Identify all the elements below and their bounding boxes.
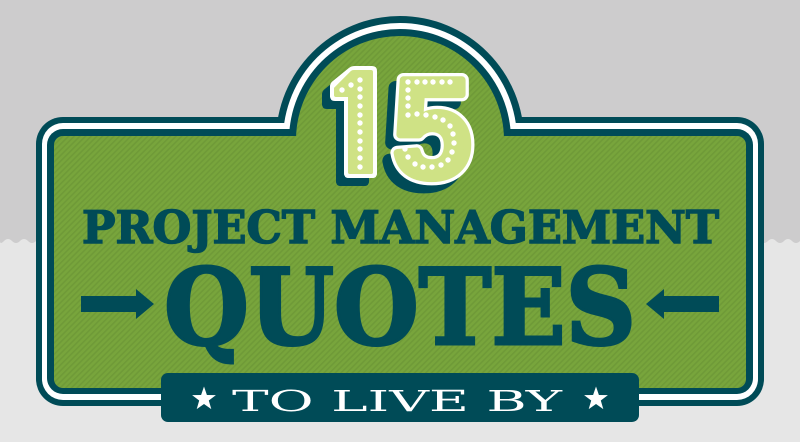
green panel [54,36,746,388]
number shadow: 5 [385,57,463,215]
banner text: TO LIVE BY [232,384,564,418]
number 15 [322,66,474,194]
heading: project management: PROJECT MANAGEMENT [82,201,720,254]
banner [161,373,639,422]
number one [330,66,377,178]
number dots [339,77,457,170]
white band [42,23,758,400]
star: right [584,386,608,409]
arrow: left [81,289,154,319]
arrow: right [646,289,719,319]
number five: 5 [393,49,471,207]
heading: quotes: QUOTES [164,245,636,369]
background: wavy grey band [0,0,800,243]
inner teal band [47,29,753,394]
number one: 1 [310,33,399,212]
number one: 1 [310,33,399,212]
number shadow [322,81,461,194]
star: left [192,386,216,409]
number five: 5 [393,49,471,207]
banner background [161,373,639,422]
number shadow: 1 [302,41,391,220]
